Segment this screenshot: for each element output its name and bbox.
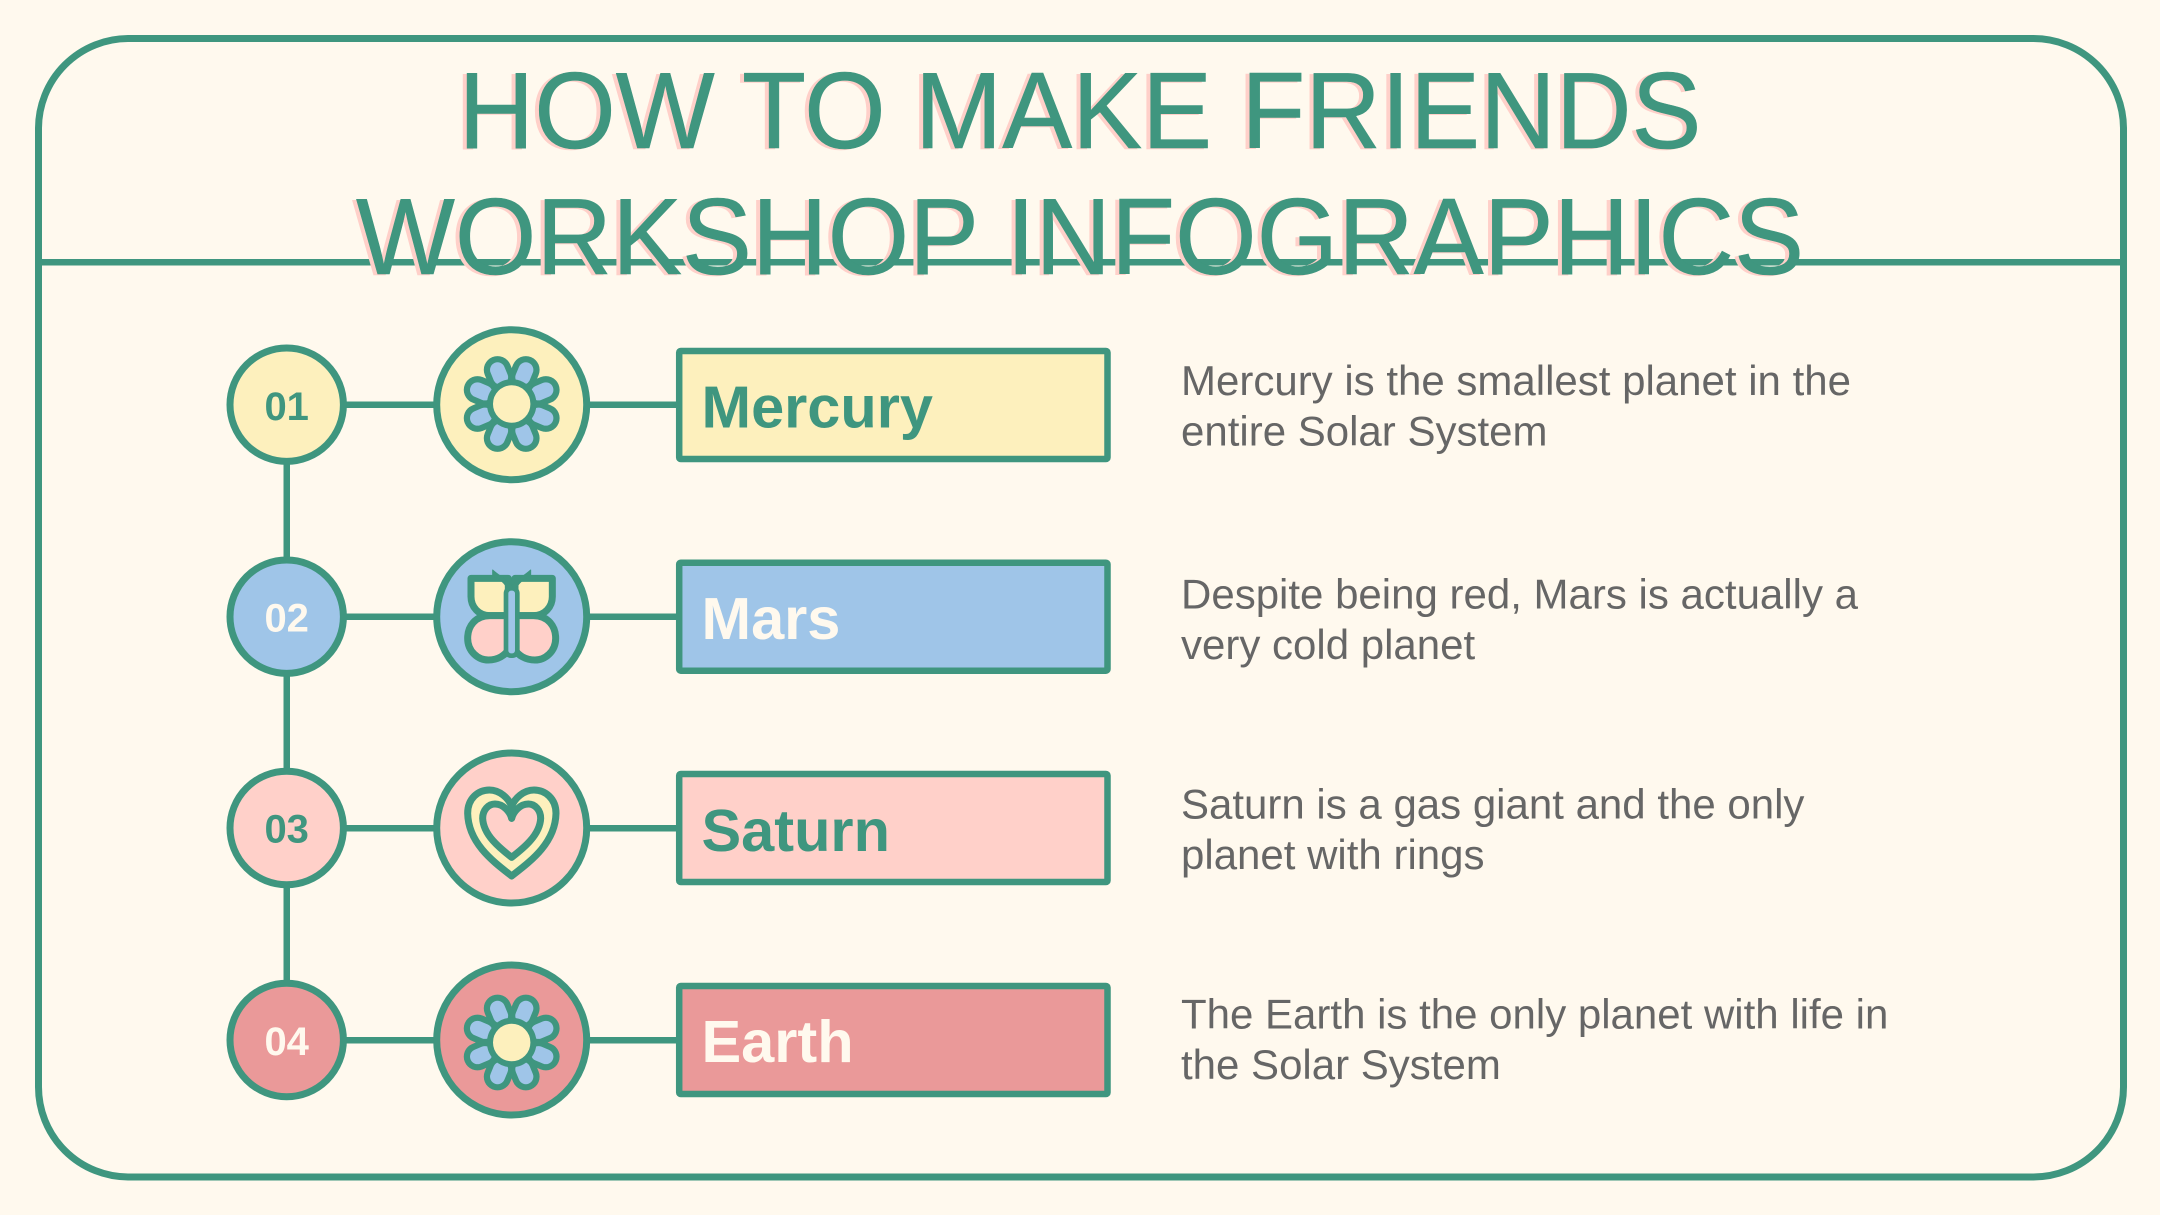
title — [352, 50, 1804, 299]
number badge 02: 02 — [264, 597, 309, 641]
label box: Mercury — [679, 351, 1108, 459]
icon: butterfly — [437, 542, 587, 692]
label box: Saturn — [679, 774, 1108, 882]
description: Mars: Despite being red, Mars is actually a — [1181, 570, 1859, 618]
number badge 01: 01 — [264, 385, 309, 429]
description: Mercury: entire Solar System — [1181, 407, 1547, 454]
label box: Earth — [679, 986, 1108, 1094]
title: WORKSHOP INFOGRAPHICS — [356, 176, 1804, 298]
number badge 04 — [230, 983, 343, 1097]
number badge 03 — [230, 771, 343, 885]
icon: heart — [437, 753, 587, 903]
row 1: Mercury — [230, 330, 1851, 480]
number badge 01 — [230, 348, 343, 461]
icon: flower — [437, 330, 587, 480]
description: Mars: very cold planet — [1181, 621, 1475, 668]
description: Saturn: Saturn is a gas giant and the only — [1181, 780, 1804, 828]
label box: Mars: Mars — [702, 585, 840, 652]
title: HOW TO MAKE FRIENDS — [458, 50, 1702, 172]
label box: Mars — [679, 563, 1108, 671]
number badge 02 — [230, 560, 343, 673]
row 2: Mars — [230, 542, 1859, 692]
description: Mercury: Mercury is the smallest planet in the — [1181, 357, 1851, 404]
number badge 03: 03 — [264, 808, 309, 852]
title: HOW TO MAKE FRIENDS — [454, 51, 1698, 173]
label box: Mercury: Mercury — [702, 374, 933, 440]
number badge 04: 04 — [264, 1020, 310, 1064]
vertical connector — [284, 405, 290, 1040]
description: Earth: the Solar System — [1181, 1041, 1501, 1088]
row 3: Saturn — [230, 753, 1804, 903]
label box: Earth: Earth — [702, 1008, 854, 1075]
description: Earth: The Earth is the only planet with life in — [1181, 990, 1888, 1038]
description: Saturn: planet with rings — [1181, 831, 1484, 878]
header divider — [38, 259, 2124, 266]
title: WORKSHOP INFOGRAPHICS — [352, 177, 1800, 299]
label box: Saturn: Saturn — [702, 797, 890, 864]
row 4: Earth — [230, 965, 1888, 1115]
icon: flower — [437, 965, 587, 1115]
